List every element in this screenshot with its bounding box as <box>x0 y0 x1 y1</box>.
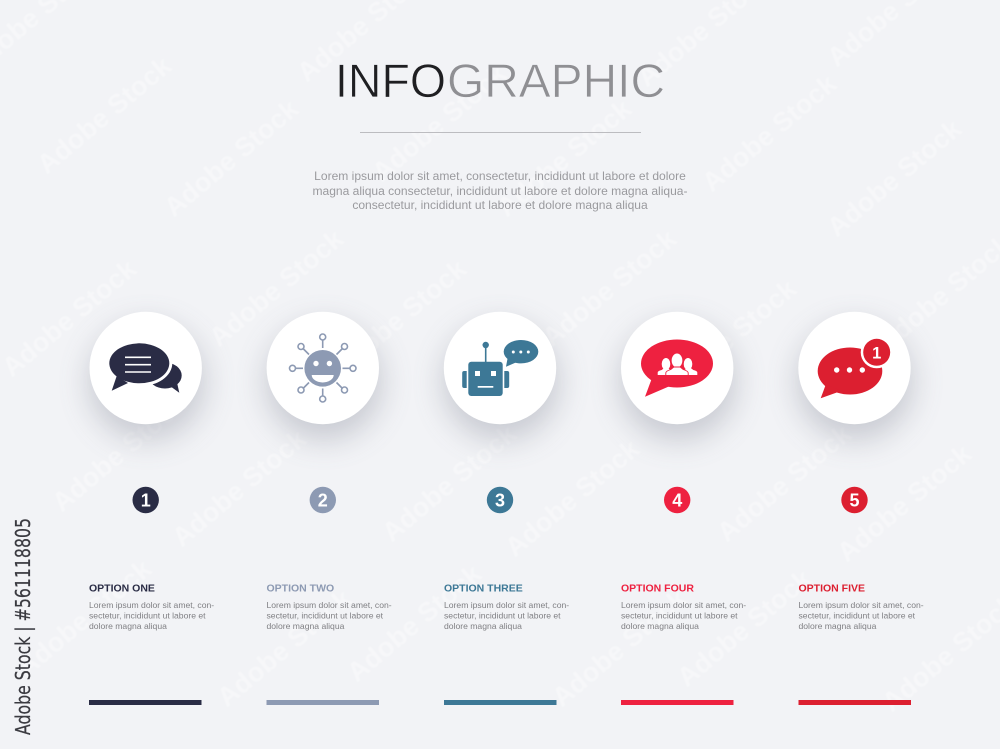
option five text: Lorem ipsum dolor sit amet, con- <box>798 600 924 610</box>
text: Adobe Stock <box>31 50 178 180</box>
intro text: consectetur, incididunt ut labore et dolore magna aliqua <box>352 198 648 212</box>
panel: option four <box>620 312 746 705</box>
icon circle 5 <box>797 312 913 440</box>
number badge 4 <box>664 487 690 513</box>
option five text: dolore magna aliqua <box>798 621 877 631</box>
number badge 3: 3 <box>495 490 505 510</box>
option two text <box>266 582 392 631</box>
text: Adobe Stock <box>711 418 858 548</box>
text: Adobe Stock <box>166 423 313 553</box>
text: Adobe Stock <box>546 583 693 713</box>
intro text: magna aliqua consectetur, incididunt ut labore et dolore magna aliqua- <box>312 184 688 198</box>
option two text: sectetur, incididunt ut labore et <box>266 610 384 620</box>
option two text: dolore magna aliqua <box>266 621 345 631</box>
number badge 1: 1 <box>141 490 151 510</box>
number badge 4: 4 <box>672 490 682 510</box>
option one text: OPTION ONE <box>89 582 155 594</box>
text: Adobe Stock <box>46 388 193 518</box>
title: INFO <box>335 54 446 107</box>
text: Adobe Stock <box>491 93 638 223</box>
text: Adobe Stock <box>656 273 803 403</box>
option one text <box>89 582 214 631</box>
icon: smiling face network <box>290 334 356 402</box>
text: Adobe Stock <box>671 563 818 693</box>
option four text <box>621 582 746 631</box>
text: Adobe Stock <box>696 68 843 198</box>
icon circle 3 <box>443 312 559 440</box>
option five text <box>798 582 924 631</box>
number badge 5: 5 <box>849 490 860 510</box>
icon: notification speech bubble: 1 <box>872 344 881 362</box>
option three text: dolore magna aliqua <box>444 621 522 631</box>
option three text: sectetur, incididunt ut labore et <box>444 610 561 620</box>
option three text: Lorem ipsum dolor sit amet, con- <box>444 600 569 610</box>
icon: group speech bubble <box>641 340 713 397</box>
option four text: Lorem ipsum dolor sit amet, con- <box>621 600 746 610</box>
icon circle 4 <box>620 312 736 440</box>
panel: option one <box>89 312 214 705</box>
option five text: OPTION FIVE <box>798 582 865 594</box>
option four text: dolore magna aliqua <box>621 621 699 631</box>
option three text <box>444 582 569 631</box>
text: Adobe Stock <box>158 93 305 223</box>
text: Adobe Stock <box>0 253 143 383</box>
text: Adobe Stock <box>326 253 473 383</box>
text: Adobe Stock <box>499 433 646 563</box>
text: Adobe Stock <box>536 223 683 353</box>
text: Adobe Stock <box>831 438 978 568</box>
panel: option five <box>797 312 924 705</box>
number badge 5 <box>841 487 868 513</box>
option three text: OPTION THREE <box>444 582 523 594</box>
text: Adobe Stock <box>211 583 358 713</box>
icon: robot with speech bubble <box>462 340 538 396</box>
icon: notification speech bubble <box>818 336 893 398</box>
panel: option three <box>443 312 569 705</box>
option two text: Lorem ipsum dolor sit amet, con- <box>266 600 392 610</box>
text: Adobe Stock <box>376 418 523 548</box>
icon: speech bubbles <box>106 340 182 393</box>
number badge 1 <box>132 487 159 513</box>
number badge 2: 2 <box>318 490 328 510</box>
title: GRAPHIC <box>447 54 665 107</box>
stock id watermark: Adobe Stock | #561118805 <box>11 518 36 735</box>
title <box>335 54 665 107</box>
option one text: sectetur, incididunt ut labore et <box>89 610 206 620</box>
number badge 2 <box>310 487 336 513</box>
text: Adobe Stock <box>821 113 968 243</box>
option five text: sectetur, incididunt ut labore et <box>798 610 916 620</box>
option one text: dolore magna aliqua <box>89 621 167 631</box>
intro text <box>312 169 688 212</box>
icon circle 2 <box>266 312 382 440</box>
number badge 3 <box>487 487 513 513</box>
panel: option two <box>266 312 392 705</box>
option one text: Lorem ipsum dolor sit amet, con- <box>89 600 214 610</box>
text: Adobe Stock <box>366 58 513 188</box>
text: Adobe Stock <box>11 553 158 683</box>
icon circle 1 <box>89 312 205 440</box>
option four text: OPTION FOUR <box>621 582 694 594</box>
option two text: OPTION TWO <box>266 582 334 594</box>
intro text: Lorem ipsum dolor sit amet, consectetur, incididunt ut labore et dolore <box>314 169 686 183</box>
option four text: sectetur, incididunt ut labore et <box>621 610 738 620</box>
text: Adobe Stock <box>203 223 350 353</box>
text: Adobe Stock <box>341 558 488 688</box>
